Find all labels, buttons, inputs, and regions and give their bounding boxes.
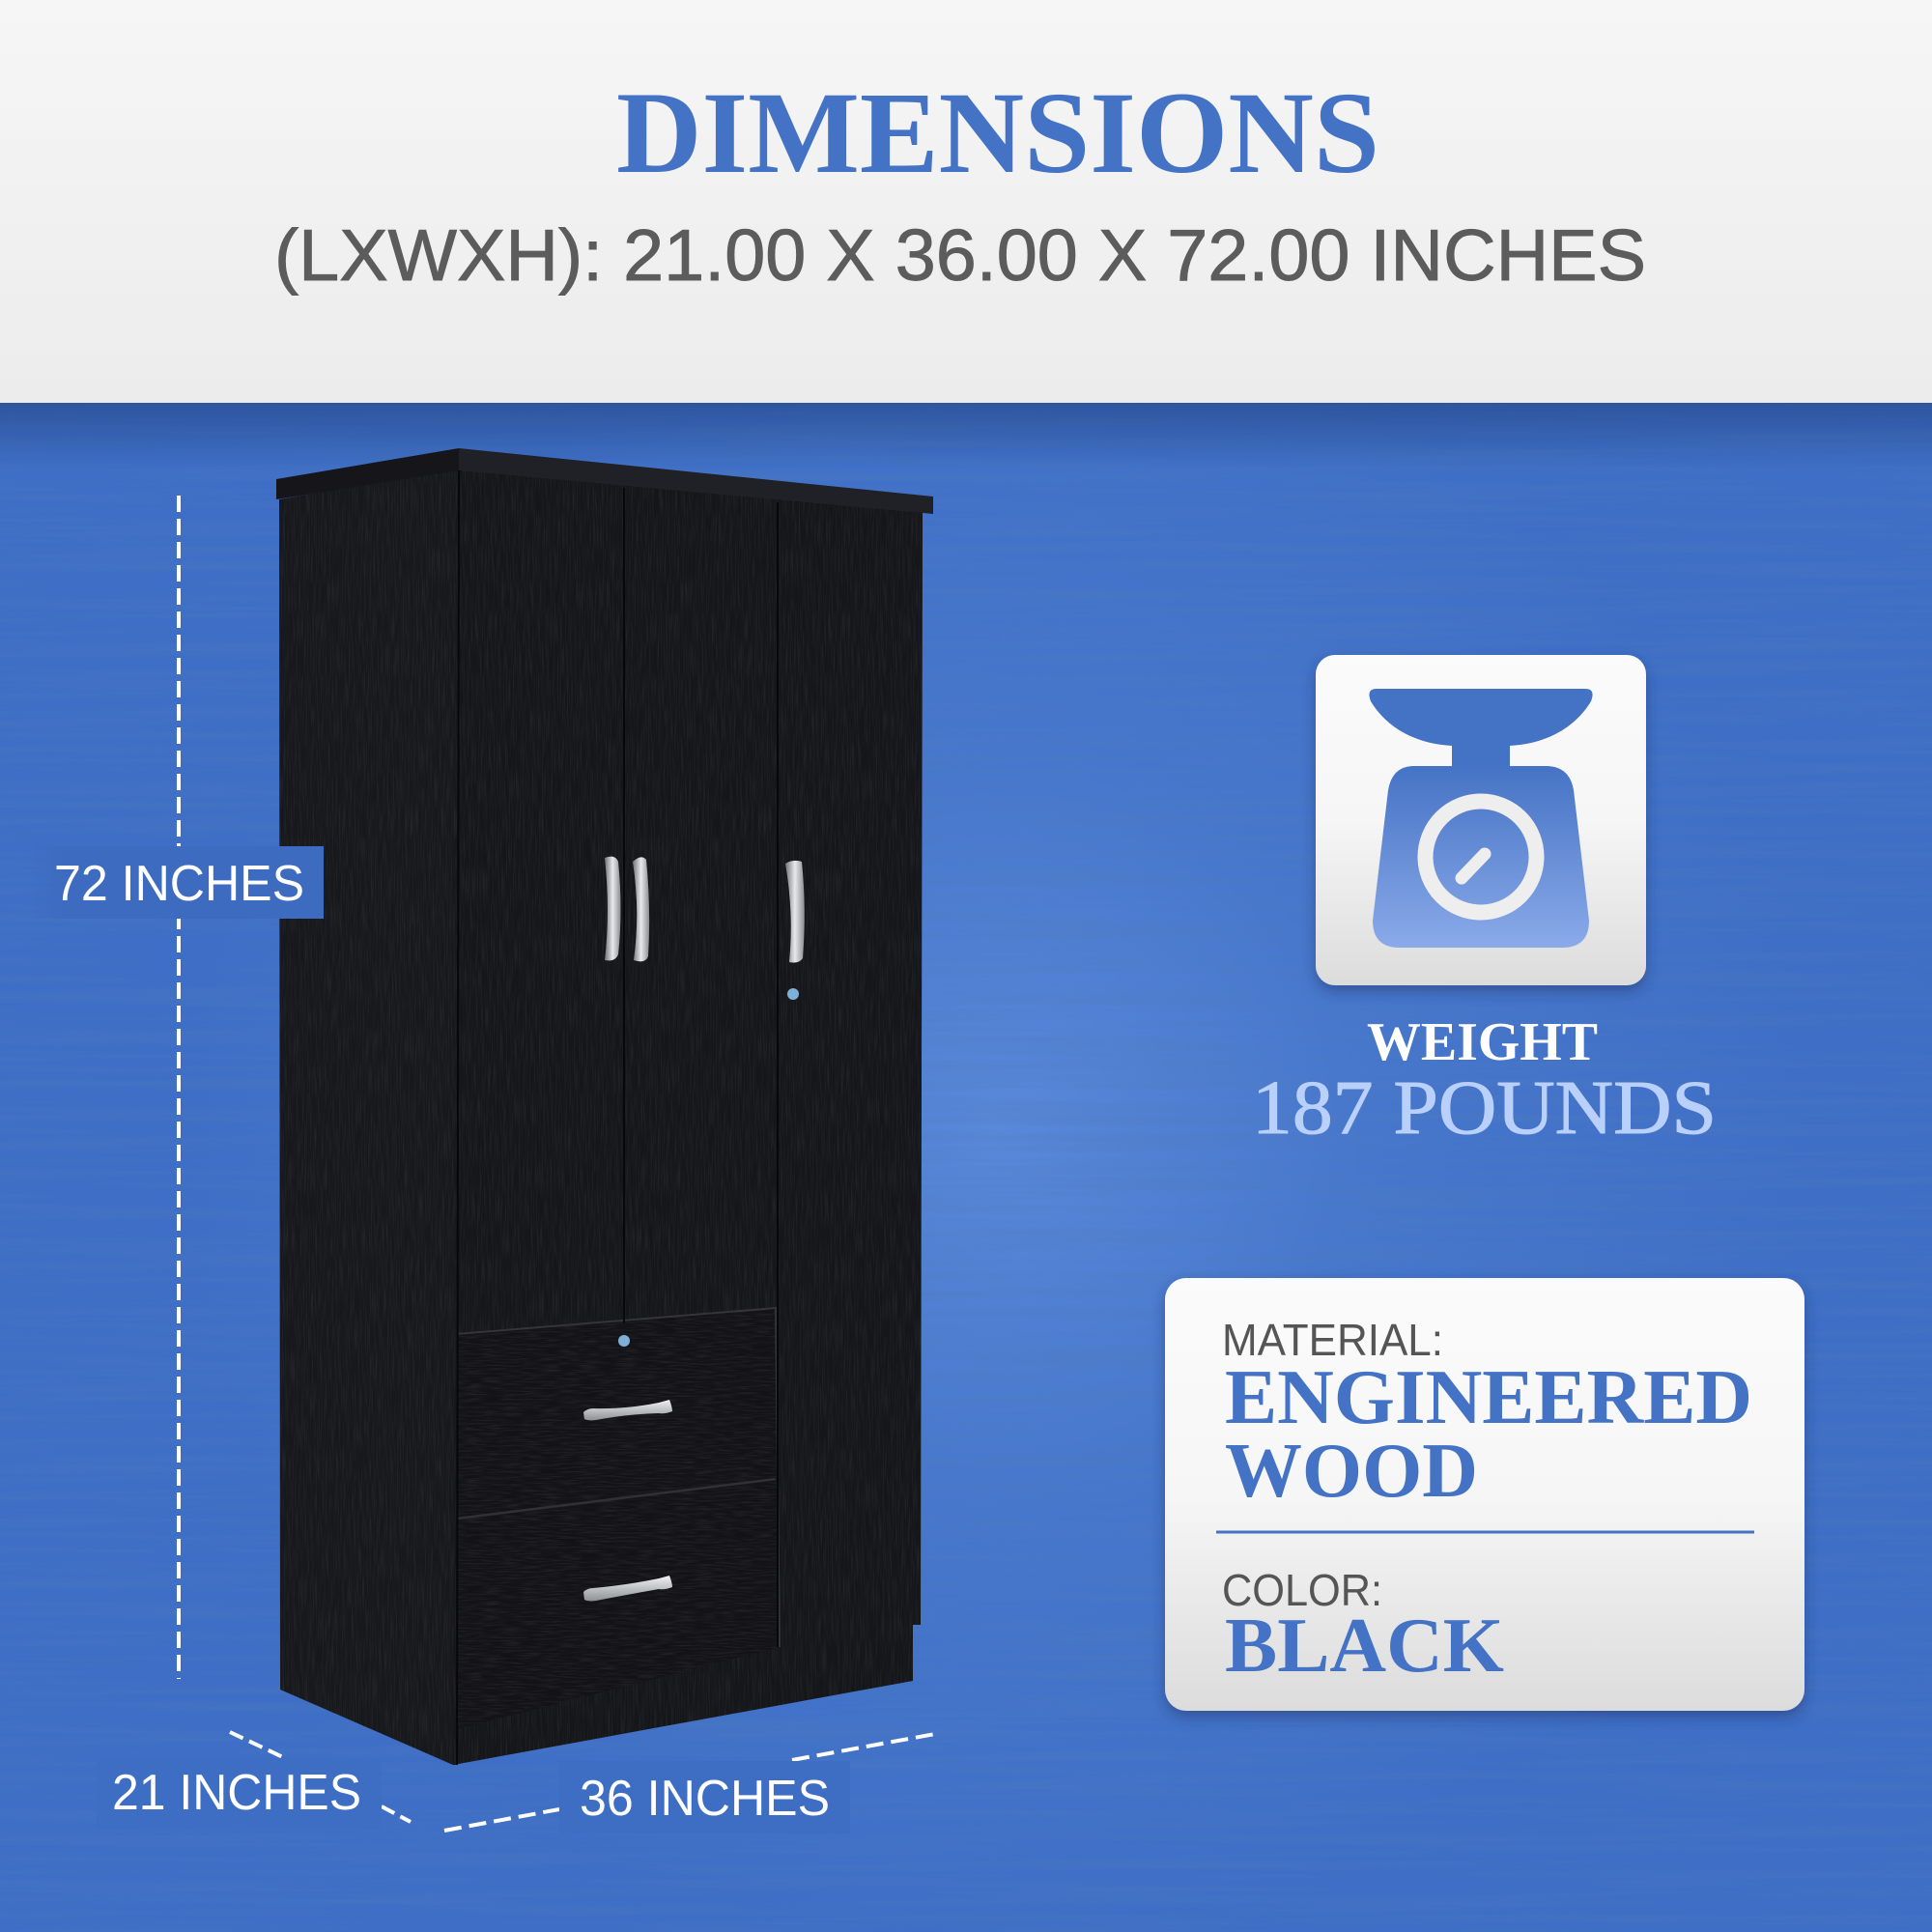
width dashed lines xyxy=(444,1734,935,1831)
label: 72 inches: 72 INCHES xyxy=(54,856,304,912)
drawers xyxy=(454,1304,782,1734)
title: DIMENSIONS xyxy=(616,69,1379,198)
label: 21 inches: 21 INCHES xyxy=(112,1765,361,1821)
wardrobe top cap xyxy=(276,448,933,514)
wardrobe side panel xyxy=(279,468,459,1765)
weight heading: WEIGHT xyxy=(1367,1012,1598,1072)
wardrobe front xyxy=(453,468,923,1765)
panel: material and color xyxy=(1165,1278,1804,1711)
material label: MATERIAL: xyxy=(1222,1315,1443,1365)
depth dashed lines xyxy=(230,1732,411,1822)
panel: weight xyxy=(1252,655,1717,1151)
material value xyxy=(1225,1355,1752,1514)
subtitle: (LXWXH): 21.00 X 36.00 X 72.00 INCHES xyxy=(274,214,1646,296)
material value: ENGINEERED xyxy=(1225,1355,1752,1440)
background: blue wood panel xyxy=(0,402,1932,1932)
door seams xyxy=(457,470,778,1765)
panel: header xyxy=(0,0,1932,403)
icon: kitchen scale xyxy=(1316,655,1646,985)
drawer handles xyxy=(583,1400,672,1601)
locks xyxy=(618,988,799,1347)
label: 72 inches xyxy=(29,846,324,919)
label: 36 inches: 36 INCHES xyxy=(580,1771,830,1827)
height dashed line xyxy=(177,496,181,1679)
material value: WOOD xyxy=(1225,1429,1478,1514)
door handles xyxy=(605,857,805,962)
weight value: 187 POUNDS xyxy=(1252,1066,1717,1151)
color value: BLACK xyxy=(1225,1604,1504,1689)
wardrobe xyxy=(275,448,933,1768)
color label: COLOR: xyxy=(1222,1565,1382,1615)
label: 36 inches xyxy=(559,1761,850,1833)
